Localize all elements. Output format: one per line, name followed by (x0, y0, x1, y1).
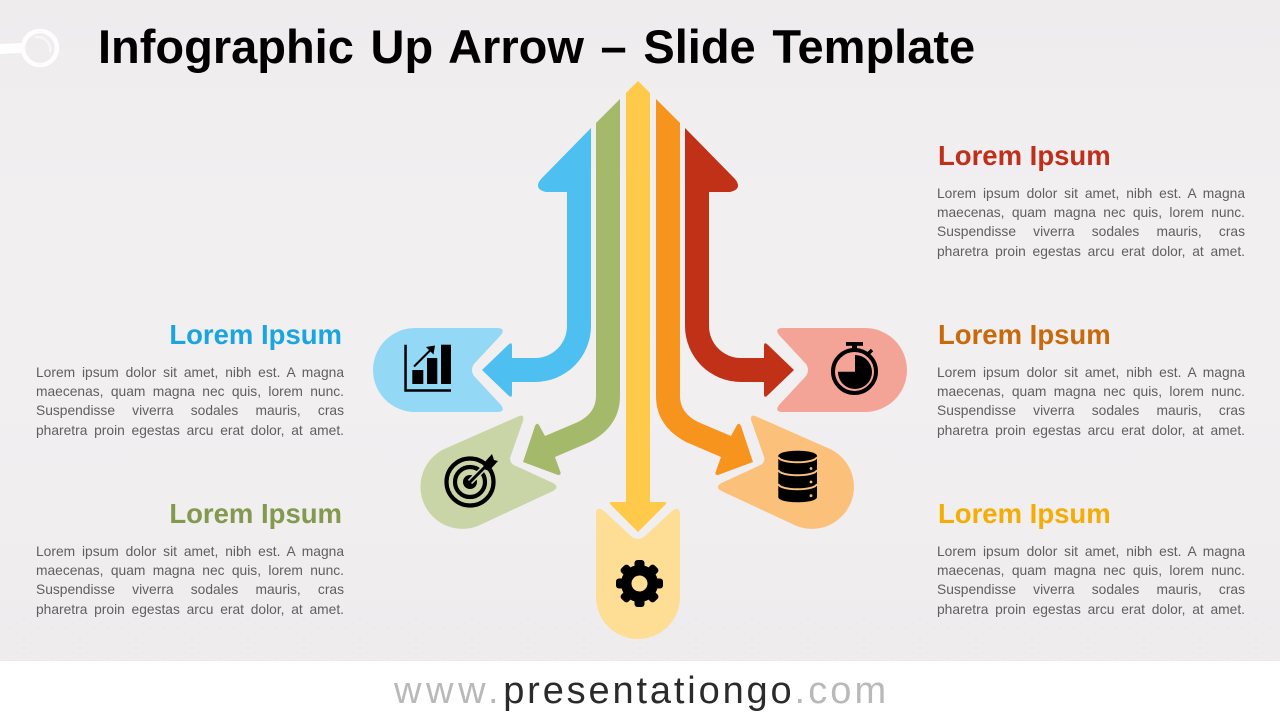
body: dark orange: Lorem ipsum dolor sit amet, nibh est. A magna (937, 365, 1245, 380)
pill: blue (373, 328, 503, 412)
arrow: green (523, 99, 620, 475)
body: green: pharetra proin egestas arcu erat dolor, at amet. (36, 602, 344, 617)
body: green: maecenas, quam magna nec quis, lorem nunc. (36, 563, 344, 578)
body: red: Lorem ipsum dolor sit amet, nibh est. A magna (937, 186, 1245, 201)
heading: red: Lorem Ipsum (938, 140, 1111, 171)
heading: dark orange: Lorem Ipsum (938, 319, 1111, 350)
body: green: Lorem ipsum dolor sit amet, nibh est. A magna (36, 544, 344, 559)
icon: target (446, 454, 498, 506)
pill: red (777, 328, 907, 412)
title: Infographic Up Arrow – Slide Template (98, 20, 975, 73)
arrow: orange (656, 99, 753, 475)
body: red (937, 186, 1246, 259)
pill: orange (718, 416, 854, 529)
body: yellow (937, 544, 1246, 617)
body: dark orange: pharetra proin egestas arcu erat dolor, at amet. (937, 423, 1245, 438)
pill: green (420, 416, 556, 529)
icon: bar chart (404, 345, 451, 392)
segment: orange (656, 99, 854, 529)
text block: green (36, 498, 344, 617)
segment: blue (373, 128, 591, 412)
footer website: www.presentationgo.com (394, 670, 889, 712)
body: red: Suspendisse viverra sodales mauris, cras (937, 224, 1245, 239)
text block: blue (36, 319, 344, 438)
body: red: maecenas, quam magna nec quis, lorem nunc. (937, 205, 1245, 220)
text block: red (937, 140, 1246, 259)
text block: yellow (937, 498, 1246, 617)
icon: header pin (0, 31, 57, 65)
body: yellow: pharetra proin egestas arcu erat dolor, at amet. (937, 602, 1245, 617)
body: yellow: Lorem ipsum dolor sit amet, nibh est. A magna (937, 544, 1245, 559)
segment: red (685, 128, 907, 412)
body: red: pharetra proin egestas arcu erat dolor, at amet. (937, 244, 1245, 259)
icon: stopwatch (833, 342, 876, 393)
body: blue: maecenas, quam magna nec quis, lorem nunc. (36, 384, 344, 399)
arrow: blue (482, 128, 591, 397)
icon: gear (616, 560, 663, 607)
body: dark orange (937, 365, 1246, 438)
segment: yellow (596, 81, 680, 639)
heading: blue: Lorem Ipsum (169, 319, 342, 350)
body: blue: Lorem ipsum dolor sit amet, nibh est. A magna (36, 365, 344, 380)
heading: yellow: Lorem Ipsum (938, 498, 1111, 529)
pill: yellow (596, 509, 680, 639)
arrow: red (685, 128, 794, 397)
arrow: yellow (610, 81, 666, 532)
segment: green (420, 99, 620, 529)
text block: dark orange (937, 319, 1246, 438)
body: yellow: maecenas, quam magna nec quis, lorem nunc. (937, 563, 1245, 578)
icon: database (778, 451, 817, 502)
body: dark orange: maecenas, quam magna nec quis, lorem nunc. (937, 384, 1245, 399)
body: dark orange: Suspendisse viverra sodales mauris, cras (937, 403, 1245, 418)
heading: green: Lorem Ipsum (169, 498, 342, 529)
body: blue (36, 365, 344, 438)
body: blue: Suspendisse viverra sodales mauris, cras (36, 403, 344, 418)
body: yellow: Suspendisse viverra sodales mauris, cras (937, 582, 1245, 597)
body: blue: pharetra proin egestas arcu erat dolor, at amet. (36, 423, 344, 438)
body: green (36, 544, 344, 617)
body: green: Suspendisse viverra sodales mauris, cras (36, 582, 344, 597)
